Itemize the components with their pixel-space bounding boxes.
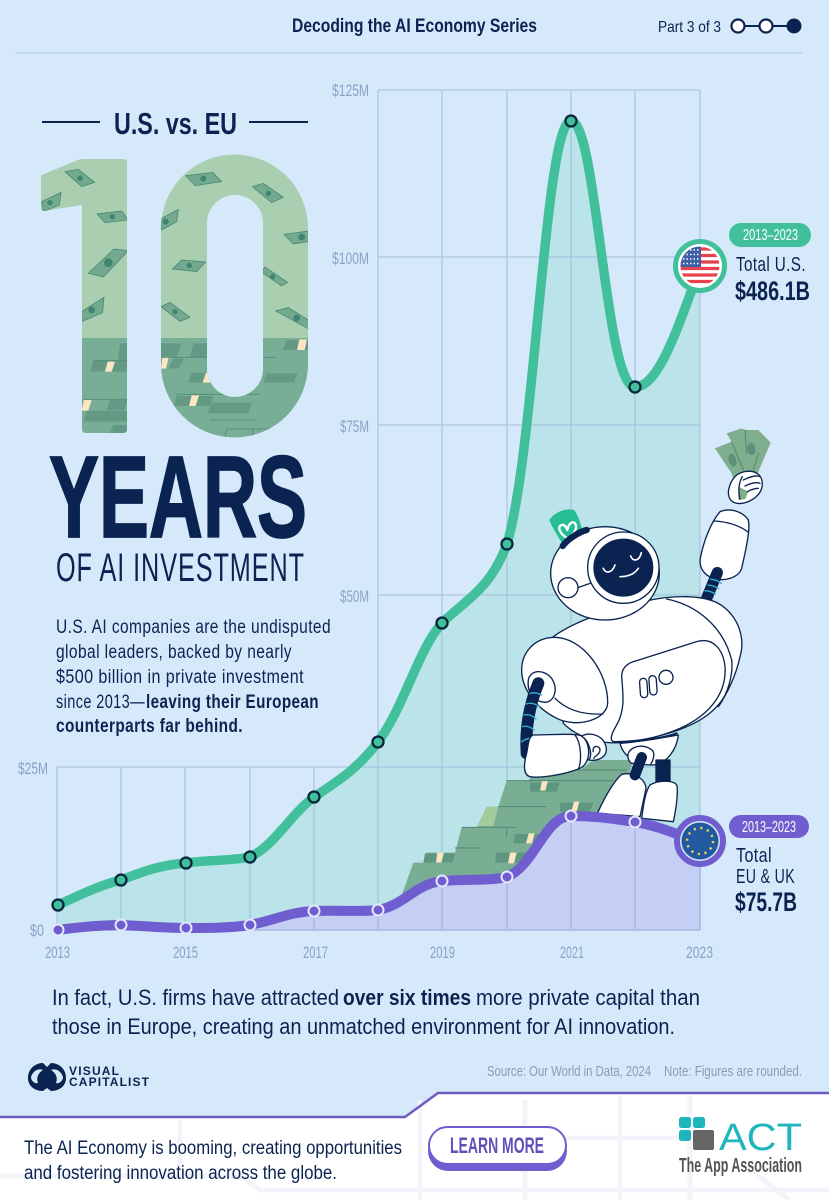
heading: YEARS: YEARS (49, 432, 307, 562)
callout: total U.S.: 2013–2023 (743, 227, 798, 244)
money stack (400, 760, 633, 900)
callout: total U.S.: Total U.S. (736, 254, 806, 276)
callout: total EU and UK: Total (736, 845, 772, 867)
text block: conclusion (52, 985, 700, 1039)
button: learn more (428, 1127, 567, 1171)
line chart: private AI investment, U.S. vs. EU and UK (52, 90, 700, 930)
axis labels: $0 (30, 921, 44, 940)
axis labels (18, 81, 713, 962)
axis labels: $125M (332, 81, 369, 100)
robot hand with cash (715, 428, 771, 504)
text block: sponsor message: and fostering innovation across the globe. (24, 1163, 337, 1184)
axis labels: $100M (332, 249, 369, 268)
icon: U.S. flag marker (676, 242, 724, 290)
U.S. area fill (58, 121, 700, 930)
text block: intro: global leaders, backed by nearly (56, 642, 292, 663)
illustration: robot holding cash (522, 428, 771, 822)
axis labels: $25M (18, 759, 48, 778)
callout: total EU and UK: 2013–2023 (742, 819, 796, 836)
logo: Visual Capitalist: CAPITALIST (69, 1075, 150, 1089)
text block: conclusion: over six times (343, 985, 471, 1010)
text block: conclusion: those in Europe, creating an unmatched environment for AI innovation. (52, 1014, 675, 1039)
axis labels: 2019 (430, 943, 455, 962)
text block: intro: since 2013— (56, 692, 145, 713)
header: part indicator: Part 3 of 3 (658, 19, 721, 36)
robot legs (597, 733, 678, 822)
axis labels: $50M (340, 587, 369, 606)
robot front panel (611, 641, 725, 742)
icon: EU flag marker (677, 818, 723, 864)
panel: sponsor footer (0, 1093, 829, 1200)
source note: Source: Our World in Data, 2024 (487, 1063, 651, 1080)
heading: U.S. vs. EU: U.S. vs. EU (114, 106, 237, 141)
logo: ACT The App Association (679, 1117, 802, 1177)
logo: ACT The App Association: ACT (719, 1117, 802, 1159)
axis labels: 2013 (45, 943, 70, 962)
EU and UK area fill (58, 816, 700, 930)
text block: intro: counterparts far behind. (56, 716, 243, 737)
text block: conclusion: In fact, U.S. firms have attracted (52, 985, 339, 1010)
text block: intro (56, 617, 331, 737)
EU and UK data points (52, 810, 640, 936)
robot lower arm (522, 637, 608, 777)
axis labels: 2021 (560, 943, 584, 962)
callout: total EU and UK: $75.7B (735, 887, 797, 917)
text block: sponsor message (24, 1138, 402, 1184)
text block: intro: $500 billion in private investment (56, 667, 304, 688)
subheading: of AI investment: OF AI INVESTMENT (56, 546, 305, 590)
callout: total EU and UK: EU & UK (736, 866, 795, 888)
header: part indicator (658, 18, 802, 36)
axis labels: 2015 (173, 943, 198, 962)
robot head (549, 509, 659, 620)
robot raised arm (700, 510, 749, 598)
axis labels: 2023 (686, 943, 713, 962)
logo: Visual Capitalist (28, 1063, 150, 1091)
heading: big number 10 filled with money (41, 154, 308, 438)
text block: intro: U.S. AI companies are the undisputed (56, 617, 331, 638)
U.S. line (58, 121, 700, 905)
text block: sponsor message: The AI Economy is booming, creating opportunities (24, 1138, 402, 1159)
text block: conclusion: more private capital than (476, 985, 700, 1010)
axis labels: 2017 (303, 943, 328, 962)
EU and UK line (58, 816, 700, 930)
source note (487, 1063, 802, 1080)
robot body (553, 597, 742, 743)
axis labels: $75M (340, 417, 369, 436)
U.S. data points (52, 116, 640, 910)
callout: total U.S. (729, 223, 811, 306)
logo: Visual Capitalist: VISUAL (69, 1064, 119, 1078)
button: learn more: LEARN MORE (450, 1133, 544, 1158)
header: series title: Decoding the AI Economy Series (292, 16, 537, 37)
callout: total EU and UK (729, 815, 809, 917)
text block: intro: leaving their European (146, 692, 319, 713)
